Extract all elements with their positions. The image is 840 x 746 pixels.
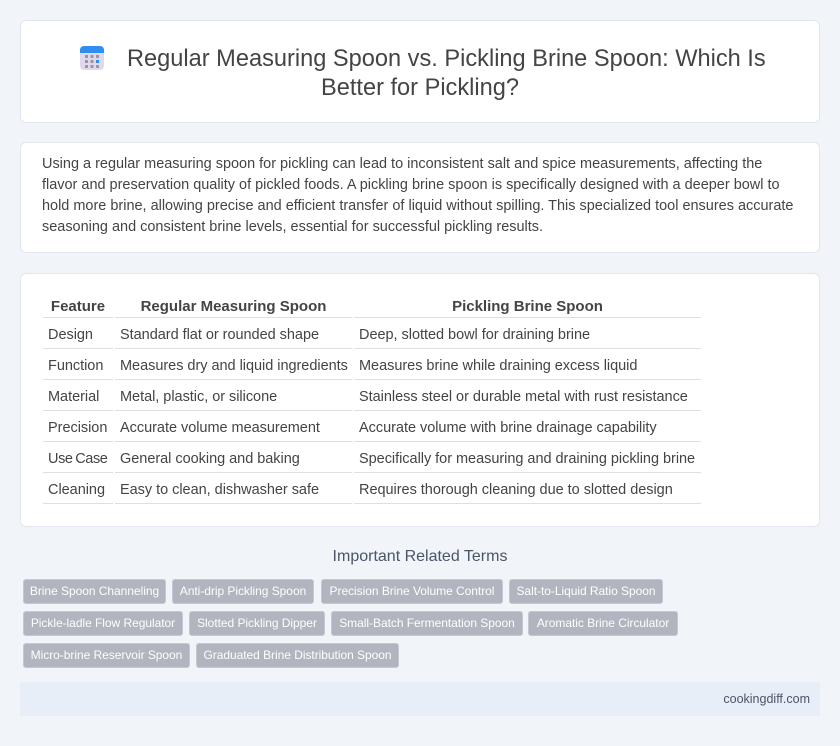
comparison table: Accurate volume measurement	[120, 420, 320, 436]
tag	[172, 579, 314, 604]
tag: Small-Batch Fermentation Spoon	[339, 616, 515, 630]
header panel	[20, 20, 820, 123]
row: cleaning: Cleaning	[48, 482, 105, 498]
tag	[331, 611, 523, 636]
tag: Precision Brine Volume Control	[330, 584, 494, 598]
comparison table: Specifically for measuring and draining pickling brine	[359, 451, 695, 467]
intro text: hold more brine, allowing precise and efficient transfer of liquid without spilling. This specialized tool ensures accurate	[42, 198, 793, 214]
comparison table: Measures dry and liquid ingredients	[120, 358, 348, 374]
icon: calendar	[80, 46, 104, 70]
intro text	[42, 156, 793, 235]
title: Better for Pickling?	[321, 75, 519, 101]
row: precision: Precision	[48, 420, 107, 436]
comparison table panel	[20, 273, 820, 527]
footer bar	[20, 682, 820, 716]
comparison table: Measures brine while draining excess liquid	[359, 358, 637, 374]
comparison table: Standard flat or rounded shape	[120, 327, 319, 343]
intro text: seasoning and consistent brine levels, essential for successful pickling results.	[42, 219, 543, 235]
tag: Slotted Pickling Dipper	[197, 616, 317, 630]
tag	[189, 611, 325, 636]
comparison table: Requires thorough cleaning due to slotted design	[359, 482, 673, 498]
row: function: Function	[48, 358, 103, 374]
comparison table: Deep, slotted bowl for draining brine	[359, 327, 590, 343]
footer site name: cookingdiff.com	[723, 692, 810, 706]
comparison table: Pickling Brine Spoon	[452, 298, 603, 315]
related terms heading: Important Related Terms	[333, 548, 507, 565]
intro text: Using a regular measuring spoon for pickling can lead to inconsistent salt and spice measurements, affecting the	[42, 156, 762, 172]
title: Regular Measuring Spoon vs. Pickling Brine Spoon: Which Is	[127, 46, 766, 72]
comparison table: General cooking and baking	[120, 451, 300, 467]
row: material: Material	[48, 389, 99, 405]
comparison table: Regular Measuring Spoon	[141, 298, 326, 315]
related terms tags	[23, 579, 678, 668]
tag	[23, 579, 166, 604]
table header: Feature	[51, 298, 105, 315]
tag: Pickle-ladle Flow Regulator	[31, 616, 175, 630]
tag	[23, 611, 183, 636]
intro text: flavor and preservation quality of pickled foods. A pickling brine spoon is specifically designed with a deeper bowl to	[42, 177, 780, 193]
tag	[321, 579, 503, 604]
row: design: Design	[48, 327, 93, 343]
comparison table: Accurate volume with brine drainage capability	[359, 420, 657, 436]
row: use case: Use Case	[48, 451, 107, 467]
tag: Anti-drip Pickling Spoon	[180, 584, 306, 598]
comparison table: Stainless steel or durable metal with rust resistance	[359, 389, 688, 405]
tag: Salt-to-Liquid Ratio Spoon	[516, 584, 656, 598]
comparison table: Metal, plastic, or silicone	[120, 389, 277, 405]
comparison table	[43, 298, 701, 504]
tag: Aromatic Brine Circulator	[537, 616, 669, 630]
comparison table: Easy to clean, dishwasher safe	[120, 482, 319, 498]
tag: Micro-brine Reservoir Spoon	[31, 648, 182, 662]
tag	[509, 579, 663, 604]
title	[127, 46, 766, 101]
tag	[528, 611, 678, 636]
tag	[23, 643, 190, 668]
tag: Brine Spoon Channeling	[30, 584, 159, 598]
intro panel	[20, 142, 820, 253]
tag	[196, 643, 399, 668]
tag: Graduated Brine Distribution Spoon	[203, 648, 392, 662]
